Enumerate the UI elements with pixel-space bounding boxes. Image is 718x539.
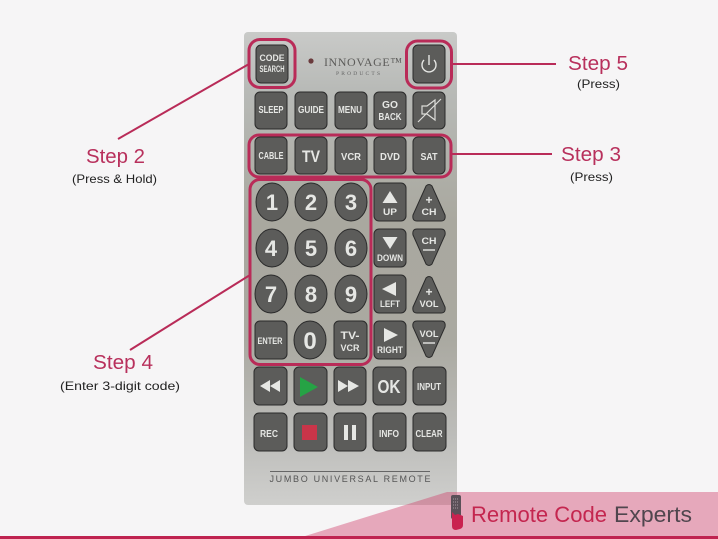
- button row: cable, tv, vcr, dvd, sat: SAT: [420, 152, 438, 163]
- step 4 label: [60, 352, 180, 393]
- button row: cable, tv, vcr, dvd, sat: CABLE: [258, 151, 284, 162]
- channel and volume keys: CH: [422, 236, 437, 247]
- button: code search: SEARCH: [260, 64, 285, 75]
- number keypad: 9: [345, 282, 357, 307]
- number keypad: 1: [266, 190, 278, 215]
- transport row: rec, stop, pause, info, clear: [254, 413, 446, 451]
- direction keys: UP: [383, 207, 398, 218]
- step 3 label: Step 3: [561, 144, 621, 166]
- brand: Innovage Products: PRODUCTS: [336, 71, 380, 77]
- jumbo universal remote label: JUMBO UNIVERSAL REMOTE: [270, 474, 430, 484]
- button row: sleep, guide, menu, go back, mute: SLEEP: [258, 105, 284, 116]
- remote control: [244, 32, 457, 505]
- number keypad: 7: [265, 282, 277, 307]
- step 4 label: (Enter 3-digit code): [60, 379, 180, 393]
- button row: cable, tv, vcr, dvd, sat: TV: [302, 147, 321, 166]
- remote body: [244, 32, 457, 505]
- number keypad: 0: [303, 328, 317, 355]
- step 2 label: (Press & Hold): [72, 172, 157, 186]
- number keypad: 4: [265, 236, 278, 261]
- channel and volume keys: +: [425, 285, 433, 299]
- button row: sleep, guide, menu, go back, mute: [255, 92, 445, 129]
- logo text: Experts: [614, 502, 692, 527]
- number keypad: 8: [305, 282, 317, 307]
- transport row: rec, stop, pause, info, clear: CLEAR: [416, 429, 443, 440]
- button: power: [413, 45, 445, 83]
- button row: sleep, guide, menu, go back, mute: GUIDE: [298, 105, 324, 116]
- button: code search: CODE: [260, 53, 284, 64]
- callout lines: [118, 64, 556, 350]
- logo text: [471, 502, 692, 527]
- number keypad: VCR: [340, 343, 360, 354]
- direction keys: DOWN: [377, 253, 403, 263]
- brand: Innovage Products: [308, 55, 402, 77]
- number keypad: [255, 183, 367, 359]
- button row: sleep, guide, menu, go back, mute: MENU: [338, 105, 362, 116]
- step 5 label: [568, 53, 628, 91]
- number keypad: 6: [345, 236, 357, 261]
- step 3 label: (Press): [570, 170, 613, 184]
- direction keys: RIGHT: [377, 345, 403, 356]
- channel and volume keys: VOL: [420, 329, 439, 340]
- direction keys: [374, 183, 406, 359]
- transport row: rewind, play, fast forward, ok, input: INPUT: [417, 382, 441, 393]
- button row: cable, tv, vcr, dvd, sat: DVD: [380, 152, 400, 163]
- highlight frames: [249, 40, 452, 364]
- button row: cable, tv, vcr, dvd, sat: VCR: [341, 152, 362, 163]
- button row: cable, tv, vcr, dvd, sat: [255, 137, 445, 174]
- number keypad: ENTER: [258, 336, 283, 347]
- step 2 label: [72, 146, 157, 186]
- number keypad: 3: [345, 190, 357, 215]
- channel and volume keys: CH: [422, 207, 437, 218]
- channel and volume keys: [413, 184, 445, 358]
- button row: sleep, guide, menu, go back, mute: BACK: [378, 112, 402, 123]
- button: code search: [256, 45, 288, 83]
- number keypad: TV-: [340, 330, 360, 342]
- button row: sleep, guide, menu, go back, mute: GO: [382, 100, 398, 111]
- footer banner: [0, 492, 718, 539]
- brand: Innovage Products: INNOVAGE™: [324, 55, 402, 69]
- transport row: rewind, play, fast forward, ok, input: [254, 367, 446, 405]
- number keypad: 2: [305, 190, 317, 215]
- channel and volume keys: +: [425, 193, 433, 207]
- transport row: rec, stop, pause, info, clear: INFO: [379, 429, 399, 440]
- number keypad: 5: [305, 236, 317, 261]
- logo icon: hand holding remote: [451, 495, 463, 530]
- channel and volume keys: VOL: [420, 299, 439, 310]
- step 5 label: Step 5: [568, 53, 628, 75]
- transport row: rewind, play, fast forward, ok, input: OK: [378, 377, 401, 397]
- logo text: Remote Code: [471, 502, 607, 527]
- step 5 label: (Press): [577, 77, 620, 91]
- step 4 label: Step 4: [93, 352, 153, 374]
- step 3 label: [561, 144, 621, 184]
- step 2 label: Step 2: [86, 146, 145, 168]
- transport row: rec, stop, pause, info, clear: REC: [260, 429, 278, 440]
- direction keys: LEFT: [380, 299, 400, 310]
